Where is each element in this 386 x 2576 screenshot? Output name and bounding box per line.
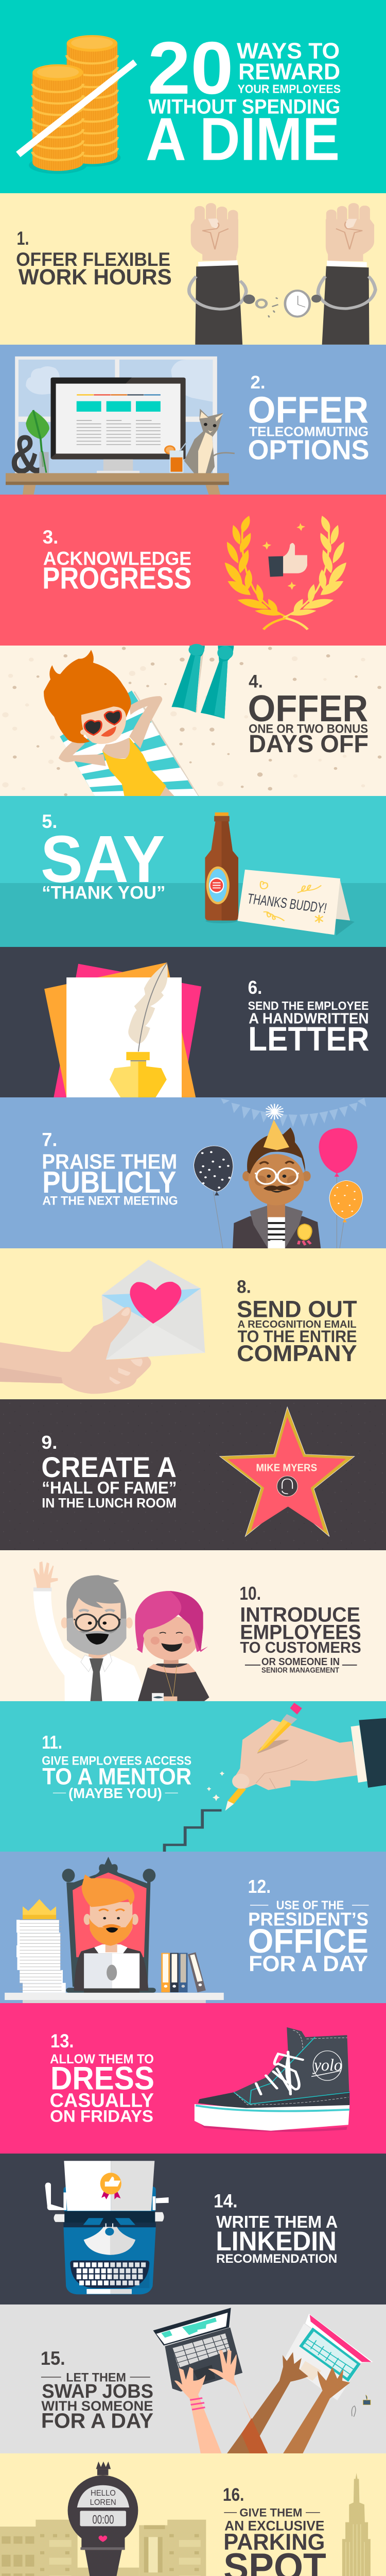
heading: praise them publicly at the next meeting: AT THE NEXT MEETING (42, 1194, 178, 1208)
heading: give them an exclusive parking spot: PARKING (223, 2529, 325, 2555)
panel: 15 swap jobs (0, 2304, 386, 2453)
heading: say thank you: SAY (41, 822, 165, 896)
icon: high-top sneaker (195, 2027, 349, 2132)
heading: create a hall of fame in the lunch room: 9. (41, 1432, 57, 1453)
heading: acknowledge progress (42, 526, 191, 596)
title: YOUR EMPLOYEES (238, 82, 341, 96)
icon: desk with monitor, plant and cat: & (10, 423, 41, 485)
heading: send out a recognition email to the entire company (237, 1277, 357, 1366)
heading: let them swap jobs with someone for a day: LET THEM (66, 2370, 126, 2384)
heading: allow them to dress casually on fridays: DRESS (50, 2060, 154, 2097)
panel: 10 introduce employees (0, 1550, 386, 1701)
panel: 5 say thank you (0, 796, 386, 947)
panel: 11 mentor (0, 1701, 386, 1852)
heading: write them a linkedin recommendation: WRITE THEM A (216, 2212, 338, 2231)
heading: acknowledge progress: 3. (43, 526, 58, 548)
heading: give them an exclusive parking spot (223, 2484, 326, 2576)
heading: let them swap jobs with someone for a day: WITH SOMEONE (41, 2399, 153, 2414)
heading: offer flexible work hours: WORK HOURS (19, 265, 172, 290)
heading: praise them publicly at the next meeting: PUBLICLY (42, 1165, 176, 1199)
heading: praise them publicly at the next meeting (42, 1129, 178, 1208)
panel: 2 telecommuting (0, 345, 386, 495)
illustration: city skyline (0, 2473, 371, 2576)
heading: send out a recognition email to the entire company: A RECOGNITION EMAIL (238, 1318, 357, 1330)
heading: introduce employees to customers: 10. (239, 1583, 261, 1604)
panel: 1 flexible work hours (0, 193, 386, 345)
heading: give employees access to a mentor: (MAYBE YOU) (68, 1785, 162, 1801)
heading: say thank you (41, 811, 165, 903)
panel: hero header (0, 0, 386, 193)
heading: introduce employees to customers: OR SOMEONE IN (261, 1655, 340, 1667)
heading: let them swap jobs with someone for a day: 15. (41, 2347, 65, 2369)
icon: hand drawing stairs with pencil (165, 1703, 386, 1852)
heading: acknowledge progress: PROGRESS (42, 562, 191, 596)
heading: write them a linkedin recommendation: LINKEDIN (216, 2226, 337, 2256)
heading: allow them to dress casually on fridays (50, 2030, 154, 2126)
heading: offer one or two bonus days off (248, 671, 369, 758)
title: 20 (148, 26, 233, 110)
heading: send out a recognition email to the entire company: COMPANY (237, 1340, 357, 1366)
panel: 4 bonus days off (0, 644, 386, 796)
icon: walk of fame star: MIKE MYERS (256, 1462, 317, 1473)
heading: acknowledge progress: ACKNOWLEDGE (43, 548, 191, 569)
heading: say thank you: “THANK YOU” (42, 883, 165, 903)
heading: let them swap jobs with someone for a day: FOR A DAY (41, 2409, 153, 2432)
heading: give employees access to a mentor: TO A MENTOR (42, 1763, 191, 1789)
panel: 8 recognition email (0, 1248, 386, 1399)
title: WAYS TO (237, 38, 340, 63)
heading: praise them publicly at the next meeting: 7. (42, 1129, 57, 1150)
heading: praise them publicly at the next meeting: PRAISE THEM (42, 1149, 177, 1173)
heading: give them an exclusive parking spot: 16. (223, 2484, 244, 2505)
panel: 7 praise publicly (0, 1097, 386, 1248)
heading: offer flexible work hours: OFFER FLEXIBLE (16, 249, 170, 270)
heading: write them a linkedin recommendation (214, 2190, 338, 2265)
icon: letter sheets, quill and ink bottle (44, 962, 201, 1097)
icon: beer bottle and thank-you card (205, 812, 355, 936)
heading: use of the president's office for a day: USE OF THE (276, 1899, 344, 1912)
heading: send out a recognition email to the entire company: SEND OUT (237, 1296, 357, 1322)
illustration: sand dots (2, 647, 381, 796)
heading: allow them to dress casually on fridays: ALLOW THEM TO (50, 2052, 154, 2066)
heading: introduce employees to customers (239, 1583, 361, 1674)
icon: party man with balloons (194, 1104, 363, 1248)
icon: desk with monitor, plant and cat (6, 357, 235, 495)
panel: 14 linkedin recommendation (0, 2154, 386, 2304)
icon: parking meter: HELLO (91, 2488, 116, 2498)
icon: bunting flags (221, 1098, 366, 1127)
heading: create a hall of fame in the lunch room: CREATE A (41, 1451, 177, 1483)
panel: 12 president's office (0, 1852, 386, 2003)
heading: send the employee a handwritten letter (248, 977, 369, 1058)
heading: let them swap jobs with someone for a day: SWAP JOBS (42, 2380, 153, 2402)
heading: send out a recognition email to the entire company: 8. (237, 1277, 251, 1297)
icon: woman sunbathing with flippers (44, 644, 234, 796)
heading: offer flexible work hours (16, 227, 172, 290)
panel: 16 parking spot (0, 2453, 386, 2576)
heading: create a hall of fame in the lunch room (41, 1432, 177, 1511)
icon: arms typing on two laptops (153, 2308, 373, 2453)
heading: write them a linkedin recommendation: 14. (214, 2190, 238, 2212)
icon: older man waving and pink-haired woman (33, 1562, 209, 1701)
heading: give employees access to a mentor (42, 1732, 191, 1801)
icon: stacks of gold coins crossed out (16, 35, 137, 174)
heading: allow them to dress casually on fridays: ON FRIDAYS (50, 2107, 153, 2126)
heading: allow them to dress casually on fridays: CASUALLY (50, 2090, 154, 2111)
heading: offer telecommuting options (248, 372, 369, 465)
heading: allow them to dress casually on fridays: 13. (50, 2030, 74, 2052)
panel: 9 hall of fame (0, 1399, 386, 1550)
icon: parking meter: 00:00 (92, 2513, 114, 2527)
icon: laurel wreath with thumbs up (225, 516, 346, 630)
icon: high-top sneaker: yolo (312, 2056, 342, 2074)
title (146, 26, 341, 173)
icon: hands breaking handcuffs with clock (189, 203, 375, 345)
heading: use of the president's office for a day: 12. (248, 1876, 271, 1897)
panel: 6 handwritten letter (0, 947, 386, 1097)
heading: write them a linkedin recommendation: RECOMMENDATION (216, 2252, 337, 2265)
icon: man on throne at desk with crown and binders (5, 1857, 224, 2003)
heading: use of the president's office for a day (248, 1876, 369, 1976)
heading: send the employee a handwritten letter: 6. (248, 977, 262, 998)
heading: offer telecommuting options: 2. (250, 372, 266, 393)
title: REWARD (238, 59, 340, 84)
heading: offer one or two bonus days off: 4. (249, 671, 263, 691)
panel: 3 acknowledge progress (0, 495, 386, 646)
heading: introduce employees to customers: SENIOR MANAGEMENT (261, 1666, 340, 1674)
heading: offer flexible work hours: 1. (17, 227, 29, 249)
heading: let them swap jobs with someone for a day (41, 2347, 153, 2432)
heading: say thank you: 5. (42, 811, 57, 832)
heading: give them an exclusive parking spot: GIVE THEM (239, 2506, 302, 2519)
icon: parking meter: LOREN (90, 2498, 116, 2507)
icon: hand holding envelope with heart (0, 1260, 205, 1394)
heading: create a hall of fame in the lunch room: IN THE LUNCH ROOM (42, 1496, 177, 1511)
icon: walk of fame star (220, 1407, 355, 1536)
icon: parking meter (68, 2462, 138, 2576)
heading: create a hall of fame in the lunch room: “HALL OF FAME” (42, 1479, 177, 1498)
icon: typewriter with thumbs-up certificate (45, 2161, 169, 2294)
panel: 13 dress casually (0, 2003, 386, 2154)
heading: give employees access to a mentor: GIVE EMPLOYEES ACCESS (42, 1754, 191, 1768)
heading: give employees access to a mentor: 11. (42, 1732, 62, 1753)
heading: give them an exclusive parking spot: AN EXCLUSIVE (224, 2519, 324, 2534)
